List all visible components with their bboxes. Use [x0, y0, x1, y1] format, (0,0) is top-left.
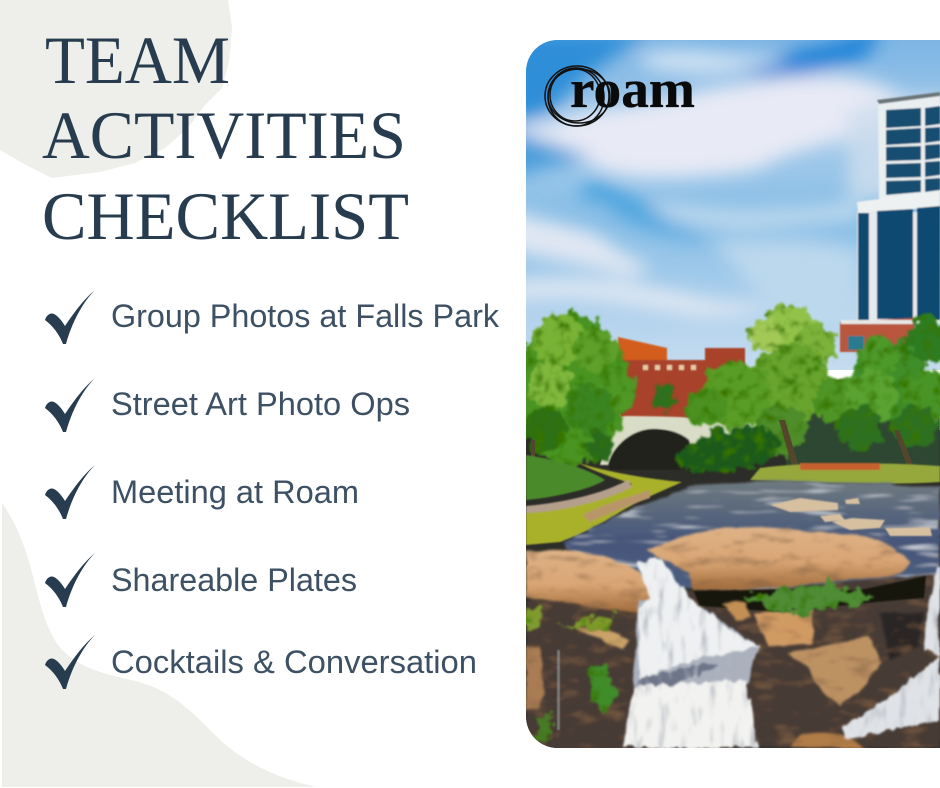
title: CHECKLIST: [42, 178, 409, 254]
rock: dark ledge right: [879, 613, 923, 660]
trees: [516, 304, 940, 466]
far background behind trees: [786, 380, 940, 470]
bridge: [599, 415, 756, 470]
tree: left: [516, 314, 638, 466]
decorative blob: bottom left: [2, 503, 316, 787]
rock: tan stepping: [753, 610, 813, 647]
tree: centre: [685, 304, 857, 456]
tree: right: [838, 316, 940, 450]
ground backdrop: [526, 430, 940, 750]
left bank: [526, 455, 682, 545]
decorative blob: top left: [0, 0, 232, 178]
rock: left: [526, 550, 653, 613]
waterfall: main: [623, 557, 759, 748]
item: street art: Street Art Photo Ops: [111, 386, 410, 422]
item: group photos: Group Photos at Falls Park: [111, 298, 500, 334]
item: meeting: [45, 465, 359, 519]
logo ring: [545, 66, 610, 126]
rocks: [526, 527, 923, 748]
rock: left tan column: [526, 647, 544, 710]
checklist: [45, 290, 500, 689]
rock: central: [646, 527, 909, 590]
moss: [526, 582, 876, 742]
far bank: [750, 463, 940, 484]
item: plates: [45, 553, 357, 607]
sky: [526, 40, 940, 370]
logo: roam: [545, 59, 695, 126]
black shadow under rock: [693, 576, 926, 612]
photo: Falls Park: [500, 30, 940, 750]
item: cocktails: [45, 635, 477, 689]
title: ACTIVITIES: [42, 97, 406, 173]
clouds: [526, 40, 940, 324]
rock: tan band: [786, 637, 882, 705]
rock: bottom tan: [790, 733, 865, 748]
building: brick block left: [618, 337, 667, 372]
item: street art: [45, 378, 410, 432]
tree: small background: [651, 385, 677, 411]
item: meeting: Meeting at Roam: [111, 474, 359, 510]
tree trunks: [531, 420, 913, 466]
thin stream: [557, 650, 560, 730]
lower dark rocks: [526, 575, 940, 750]
building: tower: [618, 92, 940, 420]
rock: left tan ledge: [576, 627, 629, 650]
title: [42, 22, 409, 254]
bush by bridge: [675, 428, 781, 474]
waterfall: right: [843, 567, 940, 748]
item: plates: Shareable Plates: [111, 562, 357, 598]
river: [563, 481, 940, 600]
item: group photos: [45, 290, 500, 344]
title: TEAM: [45, 22, 230, 98]
logo wordmark: roam: [570, 59, 695, 119]
building: brick base: [840, 318, 915, 352]
item: cocktails: Cocktails & Conversation: [111, 644, 477, 680]
